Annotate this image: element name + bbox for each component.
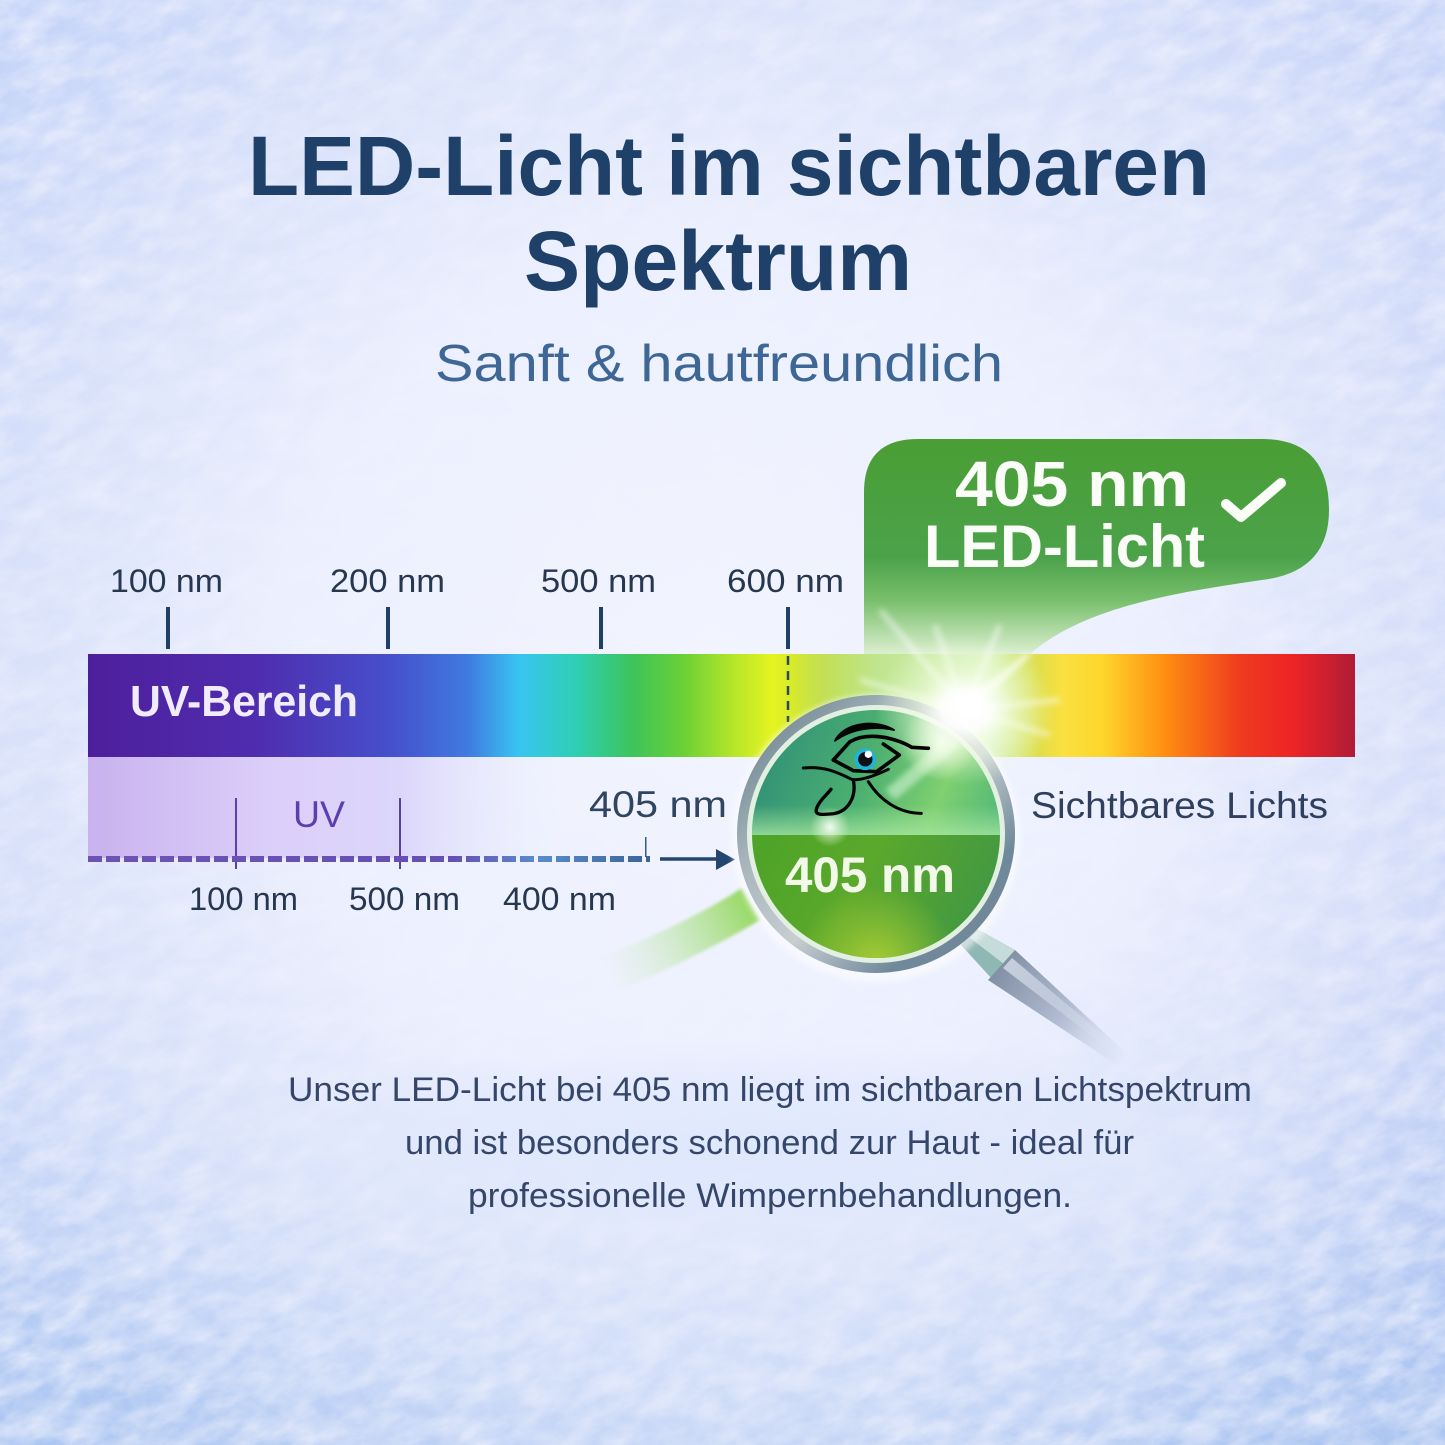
icon: check mark — [1226, 483, 1281, 517]
top scale: wavelength ticks and labels — [110, 563, 844, 722]
spectrum bar — [88, 654, 1355, 757]
callout: 405 nm LED-Licht bubble — [864, 439, 1329, 654]
body text: Unser LED-Licht bei 405 nm liegt im sichtbaren Lichtspektrum — [288, 1071, 1252, 1109]
lower scale labels: 500 nm — [349, 881, 460, 917]
top scale: wavelength ticks and labels: 100 nm — [110, 563, 223, 599]
handle — [961, 928, 1137, 1067]
top scale: wavelength ticks and labels: 600 nm — [727, 563, 844, 599]
panel: UV range block — [88, 757, 560, 869]
lower scale labels: 100 nm — [189, 881, 298, 917]
bar label: UV-Bereich: UV-Bereich — [130, 677, 358, 726]
icon: eye logo — [803, 724, 928, 814]
title — [248, 119, 1210, 308]
magnifying glass — [732, 694, 1137, 1067]
green light beam — [600, 888, 760, 990]
title: Spektrum — [524, 214, 912, 308]
lower scale labels: 405 nm — [589, 784, 727, 825]
lower scale labels: 400 nm — [503, 881, 616, 917]
panel: UV range block: UV — [293, 794, 345, 835]
top scale: wavelength ticks and labels: 200 nm — [330, 563, 445, 599]
title: LED-Licht im sichtbaren — [248, 119, 1210, 213]
body text — [288, 1071, 1252, 1215]
lower scale labels — [189, 784, 727, 917]
light flare on the bar — [860, 610, 1060, 785]
lens label: 405 nm: 405 nm — [785, 847, 955, 903]
lens glass — [750, 704, 1002, 960]
callout: 405 nm LED-Licht bubble: 405 nm — [955, 448, 1189, 520]
callout: 405 nm LED-Licht bubble: LED-Licht — [924, 513, 1205, 580]
lower scale: dashed axis with arrow — [88, 837, 735, 870]
subtitle: Sanft & hautfreundlich — [435, 335, 1003, 393]
top scale: wavelength ticks and labels: 500 nm — [541, 563, 656, 599]
lens glow — [732, 694, 1020, 982]
body text: und ist besonders schonend zur Haut - ideal für — [405, 1124, 1134, 1162]
body text: professionelle Wimpernbehandlungen. — [468, 1177, 1072, 1215]
lens rim — [742, 700, 1010, 968]
label: Sichtbares Lichts: Sichtbares Lichts — [1031, 785, 1328, 826]
